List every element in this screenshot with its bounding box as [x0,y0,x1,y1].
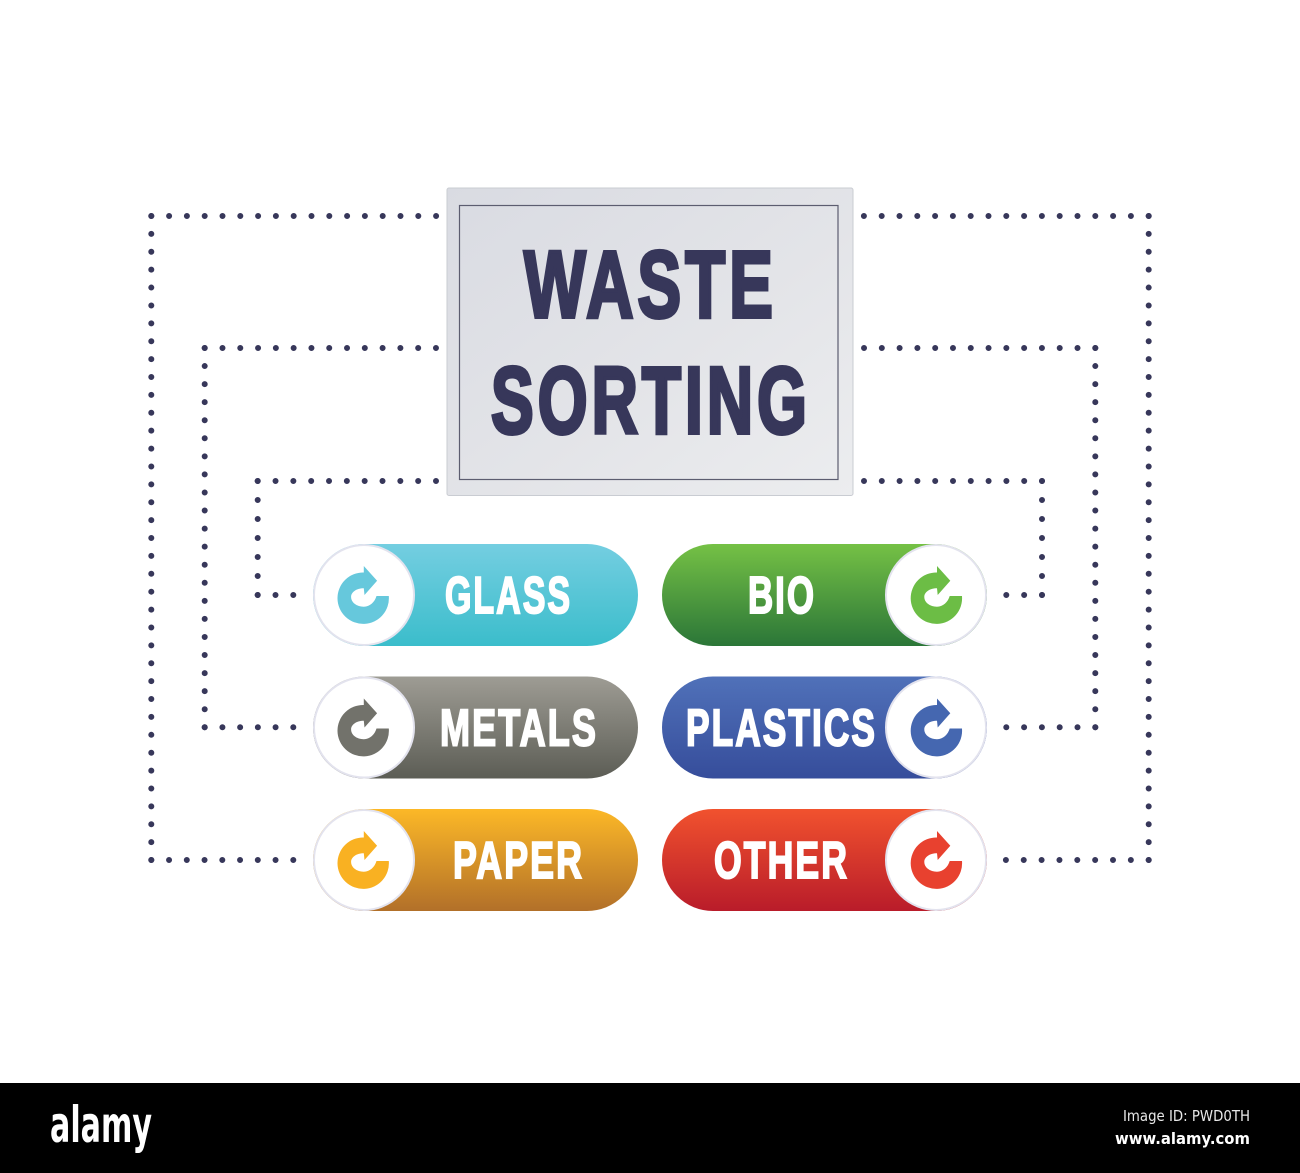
button: other [662,809,987,911]
title: sorting: SORTING [491,348,811,454]
icon: recycling arrow other [911,831,962,889]
dotted connector: bio [864,481,1042,596]
footer bar [0,1083,1300,1173]
button: metals [313,676,638,778]
panel: title sign [447,188,853,496]
image id: Image ID: PWD0TH [1123,1107,1250,1125]
label: paper: PAPER [453,832,584,890]
icon: recycling arrow bio [911,566,962,624]
button: glass [313,544,638,646]
label: other: OTHER [714,832,849,890]
icon: recycling arrow paper [337,831,389,889]
label: metals: METALS [440,700,598,758]
dotted connector: glass [258,481,436,596]
logo: alamy: alamy [50,1096,152,1154]
dotted connector: other [864,216,1149,860]
dotted connector: plastics [864,348,1095,728]
dotted connector: paper [151,216,437,860]
icon: recycling arrow plastics [911,698,962,756]
label: plastics: PLASTICS [686,700,877,758]
button: paper [313,809,638,911]
label: bio: BIO [748,567,816,625]
dotted connector: metals [205,348,436,728]
icon: recycling arrow metals [337,698,389,756]
button: plastics [662,676,987,778]
title: waste: WASTE [524,232,777,338]
button: bio [662,544,987,646]
website: www.alamy.com [1115,1129,1250,1148]
label: glass: GLASS [445,567,572,625]
icon: recycling arrow glass [337,566,389,624]
